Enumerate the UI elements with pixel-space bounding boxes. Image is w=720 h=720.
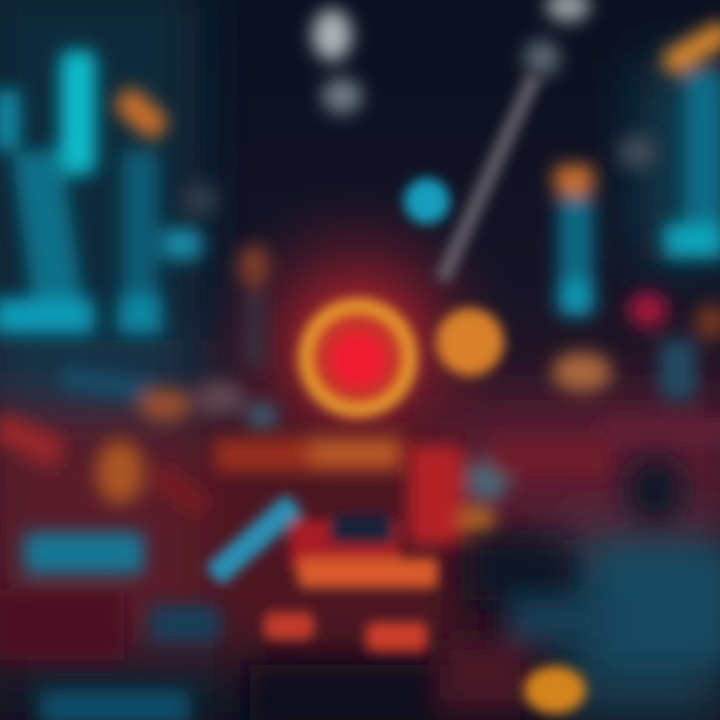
lower left cyan bars: [0, 532, 220, 720]
small orange blob upper center: [238, 244, 270, 370]
orange blob bottom: [524, 666, 586, 714]
orange circle: [436, 308, 504, 376]
left cyan blocks: [0, 50, 202, 334]
lower right dark forms: [250, 456, 720, 720]
right mid accents: [552, 292, 720, 444]
lower center cluster: [205, 493, 438, 654]
top pale blobs: [182, 0, 658, 218]
target ring: [305, 305, 411, 411]
orange accent top left: [110, 84, 172, 143]
red glow behind target: [193, 180, 523, 510]
red block right of center: [408, 440, 610, 545]
mid left streaks: [0, 366, 278, 517]
right cyan column: [554, 165, 594, 316]
diagonal beam: [442, 75, 535, 280]
right edge cyan shape: [658, 18, 720, 258]
central red platform: [215, 438, 405, 472]
cyan dot: [404, 178, 450, 224]
